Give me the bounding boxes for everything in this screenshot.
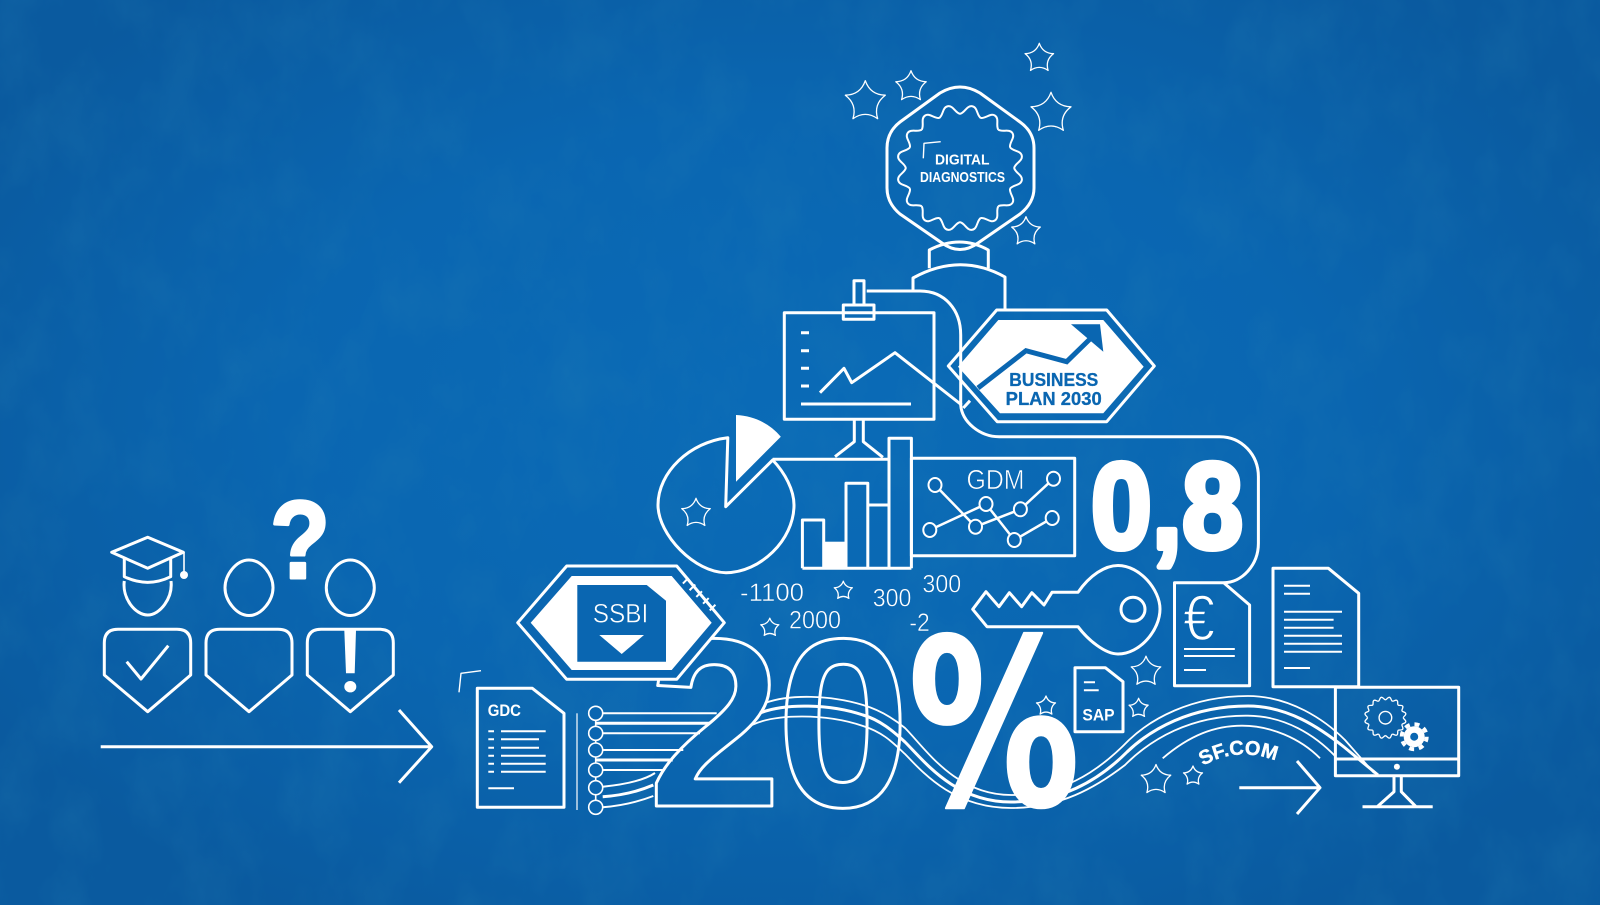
empty shield xyxy=(206,629,292,712)
document text lines xyxy=(1284,586,1342,668)
shield with check mark xyxy=(104,629,191,712)
floating numbers xyxy=(740,571,961,637)
SSBI outer ring xyxy=(518,566,724,679)
panel: text document xyxy=(1273,568,1359,687)
GDM points xyxy=(923,472,1060,547)
panel: GDC document xyxy=(459,671,564,807)
icon: graduation cap xyxy=(112,537,188,582)
floating numbers: -1100 xyxy=(740,579,804,607)
euro sign: € xyxy=(1183,582,1215,654)
arrow: left group to pyramid xyxy=(101,710,432,783)
panel: digital diagnostics badge xyxy=(887,87,1034,250)
GDC label: GDC xyxy=(488,702,521,720)
shield with exclamation mark xyxy=(307,629,393,712)
growth line xyxy=(978,339,1090,388)
SAP text lines xyxy=(1084,682,1099,690)
SSBI label: SSBI xyxy=(593,599,648,629)
badge corner mark xyxy=(923,142,941,158)
big percent sign: % xyxy=(908,590,1080,860)
flowing wave lines xyxy=(752,696,1378,808)
website label: SF.COM xyxy=(1198,740,1278,764)
stars near SAP and website xyxy=(1036,656,1203,793)
line chart xyxy=(820,353,962,405)
business plan label: BUSINESS xyxy=(1009,370,1098,390)
hexagon outer ring xyxy=(948,310,1154,422)
document sheet xyxy=(1273,568,1359,687)
board stand xyxy=(835,420,883,457)
bars xyxy=(802,438,911,568)
list with connector nodes xyxy=(577,706,717,814)
list nodes xyxy=(589,706,603,814)
bar chart xyxy=(773,438,911,568)
floating numbers: 2000 xyxy=(789,606,841,634)
GDM series lines xyxy=(930,479,1054,540)
GDM title: GDM xyxy=(966,464,1024,495)
SSBI down triangle xyxy=(599,635,644,654)
monitor power dot xyxy=(1394,764,1400,770)
badge wavy seal xyxy=(896,104,1024,232)
hexagon white fill xyxy=(958,320,1144,413)
GDC sheet xyxy=(477,688,564,807)
badge title: DIGITAL xyxy=(935,151,989,168)
SSBI tick marks xyxy=(685,580,716,611)
person one head xyxy=(124,581,171,615)
list lines xyxy=(603,713,717,807)
board clip xyxy=(843,281,874,319)
list thick lines xyxy=(596,723,710,797)
badge octagon xyxy=(887,87,1034,250)
badge title: DIAGNOSTICS xyxy=(920,169,1005,186)
list separator xyxy=(576,713,578,810)
panel: business plan hexagon xyxy=(948,310,1154,422)
floating numbers: 300 xyxy=(922,571,961,599)
GDC text lines xyxy=(488,731,546,788)
pie chart xyxy=(658,415,794,573)
SSBI white fill xyxy=(531,576,712,670)
floating numbers: 300 xyxy=(873,585,911,613)
question mark: ? xyxy=(270,479,330,602)
pie slice xyxy=(736,415,781,482)
monitor chin line xyxy=(1335,758,1459,760)
stars around badge xyxy=(845,43,1071,244)
icon: key xyxy=(973,566,1160,654)
bar chart top rule xyxy=(773,458,889,461)
axis ticks xyxy=(801,333,809,386)
panel: euro document xyxy=(1174,582,1250,686)
website label xyxy=(1198,740,1278,764)
monitor frame xyxy=(1335,687,1459,776)
panel: SSBI hexagon xyxy=(518,566,724,679)
chart baseline xyxy=(801,402,911,406)
panel: presentation board xyxy=(784,281,962,457)
people group with graduate, question and warning xyxy=(104,479,393,712)
person three head xyxy=(326,560,374,616)
euro text lines xyxy=(1184,649,1235,670)
panel: GDM chart xyxy=(911,458,1075,556)
SAP label: SAP xyxy=(1082,707,1115,725)
pie body xyxy=(658,438,794,573)
small stars among numbers xyxy=(761,581,852,635)
solid gear xyxy=(1402,724,1427,749)
SSBI document xyxy=(577,585,666,662)
big outlined number 20: 20 xyxy=(648,589,905,857)
list vertical connector xyxy=(595,713,597,807)
growth arrow head xyxy=(1071,324,1103,352)
person two head xyxy=(225,560,273,616)
floating numbers: -2 xyxy=(909,609,930,637)
GDC corner mark xyxy=(459,671,481,692)
outline gear xyxy=(1364,697,1406,739)
arrow: website to monitor xyxy=(1239,761,1320,814)
SAP sheet xyxy=(1075,668,1123,732)
board frame xyxy=(784,313,934,419)
monitor stand xyxy=(1362,777,1433,807)
white bar xyxy=(824,542,846,568)
business plan label: PLAN 2030 xyxy=(1006,389,1102,409)
panel: monitor xyxy=(1335,687,1459,807)
GDM frame xyxy=(911,458,1075,556)
pie star xyxy=(682,498,710,525)
connector pipes xyxy=(867,242,1258,583)
big number 0,8: 0,8 xyxy=(1091,438,1243,574)
euro sheet xyxy=(1174,583,1250,686)
panel: SAP document xyxy=(1075,668,1123,732)
